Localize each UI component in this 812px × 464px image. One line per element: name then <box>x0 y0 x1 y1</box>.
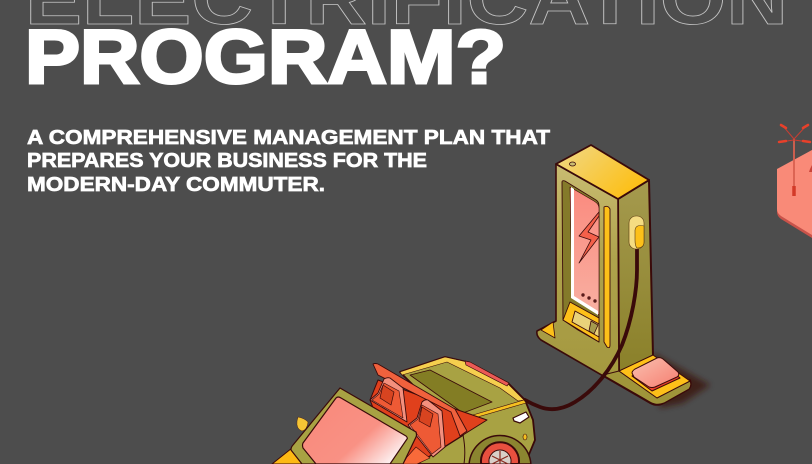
status dots <box>581 293 597 303</box>
hood <box>272 448 302 464</box>
screen <box>570 187 599 315</box>
red rear strip <box>465 361 509 386</box>
subtitle text block: MODERN-DAY COMMUTER. <box>27 174 325 196</box>
yellow lower trim <box>466 400 526 420</box>
yellow top trim <box>400 357 524 401</box>
windshield frame <box>291 388 416 464</box>
street lamp <box>779 125 810 196</box>
interior <box>370 380 487 464</box>
tail light <box>513 412 529 423</box>
subtitle text block <box>27 127 550 196</box>
wheel arch <box>469 435 531 464</box>
icon: hexagonal platform with street lamp <box>777 125 812 238</box>
wheel hub <box>489 450 511 464</box>
icon: charging station <box>525 145 710 409</box>
screen recess <box>562 181 599 342</box>
yellow slot <box>604 206 610 348</box>
side mirror <box>297 417 308 431</box>
wheel tyre <box>481 442 519 464</box>
plug holder <box>629 216 644 249</box>
base yellow wedge <box>541 322 555 338</box>
lightning bolt <box>579 212 599 263</box>
right seat <box>408 400 445 457</box>
small roadside marker <box>809 165 812 172</box>
charger top <box>556 145 649 199</box>
windshield glass <box>302 397 407 464</box>
car rear body <box>400 357 535 464</box>
subtitle text block: PREPARES YOUR BUSINESS FOR THE <box>27 150 427 172</box>
rear window <box>410 370 492 413</box>
cable <box>525 248 637 409</box>
charger front and base <box>537 164 691 405</box>
hexagon platform <box>777 150 812 238</box>
base side strip <box>603 371 691 404</box>
yellow control panel <box>563 302 599 342</box>
title: solid word: PROGRAM? <box>25 15 506 100</box>
base yellow deck <box>619 355 690 398</box>
interior floor <box>403 447 430 464</box>
charger right side <box>618 180 653 373</box>
charging pad <box>632 361 680 391</box>
subtitle text block: A COMPREHENSIVE MANAGEMENT PLAN THAT <box>27 127 550 149</box>
seat divider panel <box>373 364 467 436</box>
left seat <box>370 378 407 422</box>
icon: convertible electric car <box>272 357 535 464</box>
door line <box>463 435 465 464</box>
